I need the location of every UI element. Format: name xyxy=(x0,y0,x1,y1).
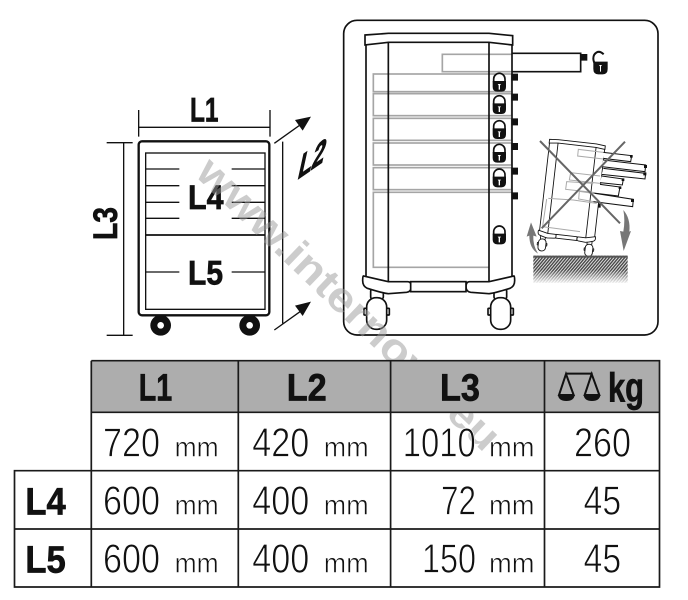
table: dimensions xyxy=(14,361,660,587)
L2 dimension line and arrows xyxy=(274,117,311,330)
padlock 1 xyxy=(493,73,506,92)
L3 dimension line xyxy=(107,143,133,335)
row: overall: 720 xyxy=(103,420,160,466)
row: overall: mm xyxy=(324,432,369,463)
right rotation arrow xyxy=(620,210,631,251)
label L2: L2 xyxy=(295,130,330,188)
row: L5: 400 xyxy=(252,535,309,581)
row: overall: 1010 xyxy=(403,420,476,466)
padlock 2 xyxy=(493,96,506,114)
header L1: L1 xyxy=(139,368,172,410)
row: L4: 400 xyxy=(252,477,309,523)
padlock 4 xyxy=(493,144,506,163)
panel border xyxy=(344,20,658,335)
label L1: L1 xyxy=(190,91,218,129)
row: L5: mm xyxy=(175,547,219,578)
row: L4: 600 xyxy=(103,477,160,523)
cabinet outline xyxy=(139,141,269,315)
label L4 in drawing: L4 xyxy=(188,179,224,217)
row: L4: mm xyxy=(489,489,534,520)
crossed out xyxy=(540,141,625,228)
header L2: L2 xyxy=(287,368,327,410)
row: L5: mm xyxy=(489,547,534,578)
watermark: www.internova.eu xyxy=(187,147,510,460)
padlock 5 xyxy=(493,169,506,187)
row: L4 xyxy=(25,477,621,523)
header weight icon: scales xyxy=(558,374,600,401)
trolley frame xyxy=(363,33,515,329)
table header background xyxy=(91,361,660,412)
dimension diagram: front view xyxy=(107,110,311,336)
row: overall: mm xyxy=(489,432,534,463)
tilted trolley frame xyxy=(536,139,606,257)
extended drawers xyxy=(593,152,646,207)
label L3: L3 xyxy=(87,207,125,240)
row: L4: 45 xyxy=(584,477,621,523)
gray drawer fronts xyxy=(373,54,512,267)
wheel left xyxy=(150,315,171,336)
row: L5 xyxy=(25,535,621,581)
row: overall xyxy=(103,420,631,466)
row: L4: mm xyxy=(324,489,369,520)
row: L5: mm xyxy=(324,547,369,578)
row: L5: 150 xyxy=(422,535,476,581)
extended top drawer xyxy=(512,53,581,72)
row: overall: 420 xyxy=(252,420,309,466)
cabinet inner frame with drawers xyxy=(146,153,265,309)
row: L4: L4 xyxy=(25,481,66,523)
row: overall: mm xyxy=(175,432,219,463)
header kg: kg xyxy=(608,365,644,411)
label L5 in drawing: L5 xyxy=(188,254,223,292)
padlock open xyxy=(593,52,608,74)
row: L4: mm xyxy=(175,489,219,520)
L1 dimension line xyxy=(139,110,270,137)
padlock 6 xyxy=(493,226,506,244)
row: overall: 260 xyxy=(574,420,631,466)
row: L4: 72 xyxy=(441,477,476,523)
panel: locking trolley xyxy=(344,20,658,335)
left rotation arrow xyxy=(527,222,538,254)
wheel right xyxy=(239,315,260,336)
drawer handles xyxy=(511,54,587,199)
tipping trolley warning xyxy=(527,139,647,284)
row: L5: 45 xyxy=(584,535,621,581)
row: L5: 600 xyxy=(103,535,160,581)
header L3: L3 xyxy=(440,368,480,410)
hatched floor xyxy=(533,256,628,284)
row: L5: L5 xyxy=(25,539,66,581)
table grid xyxy=(14,361,660,587)
padlock 3 xyxy=(493,121,506,139)
